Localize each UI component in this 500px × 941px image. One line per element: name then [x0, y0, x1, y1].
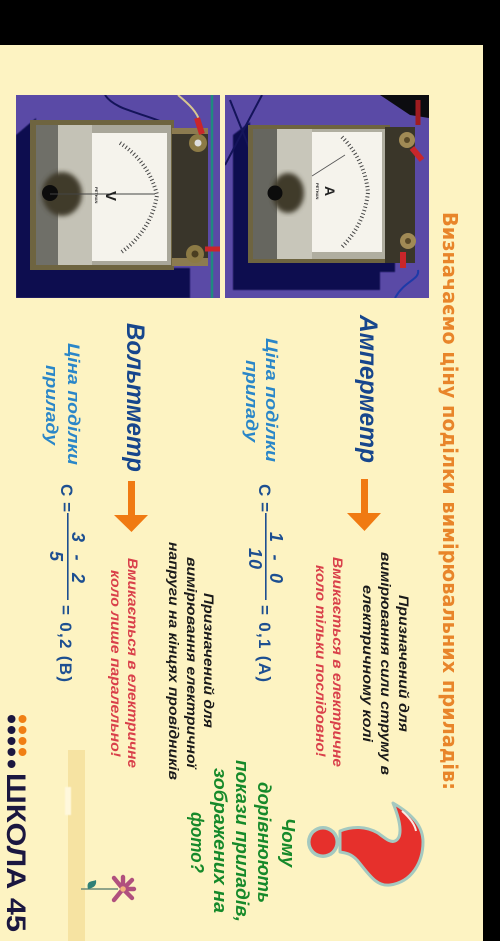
label: voltmeter scale division: приладу	[42, 365, 61, 447]
heading: voltmeter: Вольтметр	[121, 323, 149, 472]
formula: ammeter: = 0,1 (А)	[255, 605, 274, 682]
text: voltmeter purpose	[166, 542, 217, 781]
formula: voltmeter: 5	[46, 551, 66, 562]
text: ammeter connection: коло тільки послідовно!	[313, 565, 329, 757]
text: voltmeter connection	[108, 558, 141, 768]
photo: ammeter: PETHAN	[315, 183, 320, 200]
label: ammeter scale division: Ціна поділки	[262, 338, 281, 463]
logo dots	[8, 715, 26, 768]
formula: voltmeter: 3 - 2	[68, 532, 88, 583]
decorative band	[68, 750, 85, 941]
text: question: дорівнюють	[254, 782, 274, 903]
arrow: voltmeter	[114, 481, 148, 532]
text: voltmeter purpose: вимірювання електричної	[184, 557, 200, 770]
text: question: Чому	[278, 818, 298, 868]
icon: question mark	[307, 803, 423, 885]
text: voltmeter connection: Вмикається в електричне	[125, 558, 141, 768]
label: ammeter scale division: приладу	[242, 360, 261, 444]
photo: voltmeter: PETHAN	[94, 187, 99, 204]
label: ammeter scale division	[242, 338, 281, 463]
text: ammeter purpose	[360, 552, 412, 776]
formula: voltmeter: С =	[57, 484, 76, 512]
text: ammeter purpose: вимірювання сили струму в	[378, 552, 394, 776]
photo: ammeter: A	[322, 186, 338, 196]
formula: voltmeter: = 0,2 (В)	[56, 605, 75, 682]
text: question: покази приладів,	[232, 760, 252, 922]
title: Визначаємо ціну поділки вимірювальних приладів:	[438, 212, 462, 790]
label: voltmeter scale division: Ціна поділки	[64, 343, 83, 466]
photo: ammeter	[225, 95, 429, 298]
formula: ammeter	[245, 484, 286, 682]
text: ammeter purpose: Призначений для	[396, 595, 412, 732]
text: voltmeter purpose: Призначений для	[201, 593, 217, 728]
logo text: ШКОЛА 45	[1, 773, 31, 932]
text: ammeter connection	[313, 557, 346, 767]
formula: ammeter: 1 - 0	[266, 532, 286, 583]
icon: flower	[81, 877, 134, 900]
label: voltmeter scale division	[42, 343, 83, 466]
formula: ammeter: С =	[255, 484, 274, 512]
formula: voltmeter	[46, 484, 88, 682]
text: ammeter purpose: електричному колі	[360, 585, 376, 743]
photo: voltmeter: V	[102, 191, 119, 201]
text: question	[187, 760, 298, 922]
text: voltmeter purpose: напруги на кінцях провідників	[166, 542, 182, 781]
photo: voltmeter	[16, 95, 220, 298]
arrow: ammeter	[347, 479, 381, 531]
text: question: фото?	[187, 812, 207, 873]
text: ammeter connection: Вмикається в електричне	[330, 557, 346, 767]
heading: ammeter: Амперметр	[354, 314, 382, 463]
logo: school 45	[1, 715, 31, 932]
text: question: зображених на	[210, 768, 230, 913]
formula: ammeter: 10	[245, 548, 265, 569]
text: voltmeter connection: коло лише паралельно!	[108, 570, 124, 757]
